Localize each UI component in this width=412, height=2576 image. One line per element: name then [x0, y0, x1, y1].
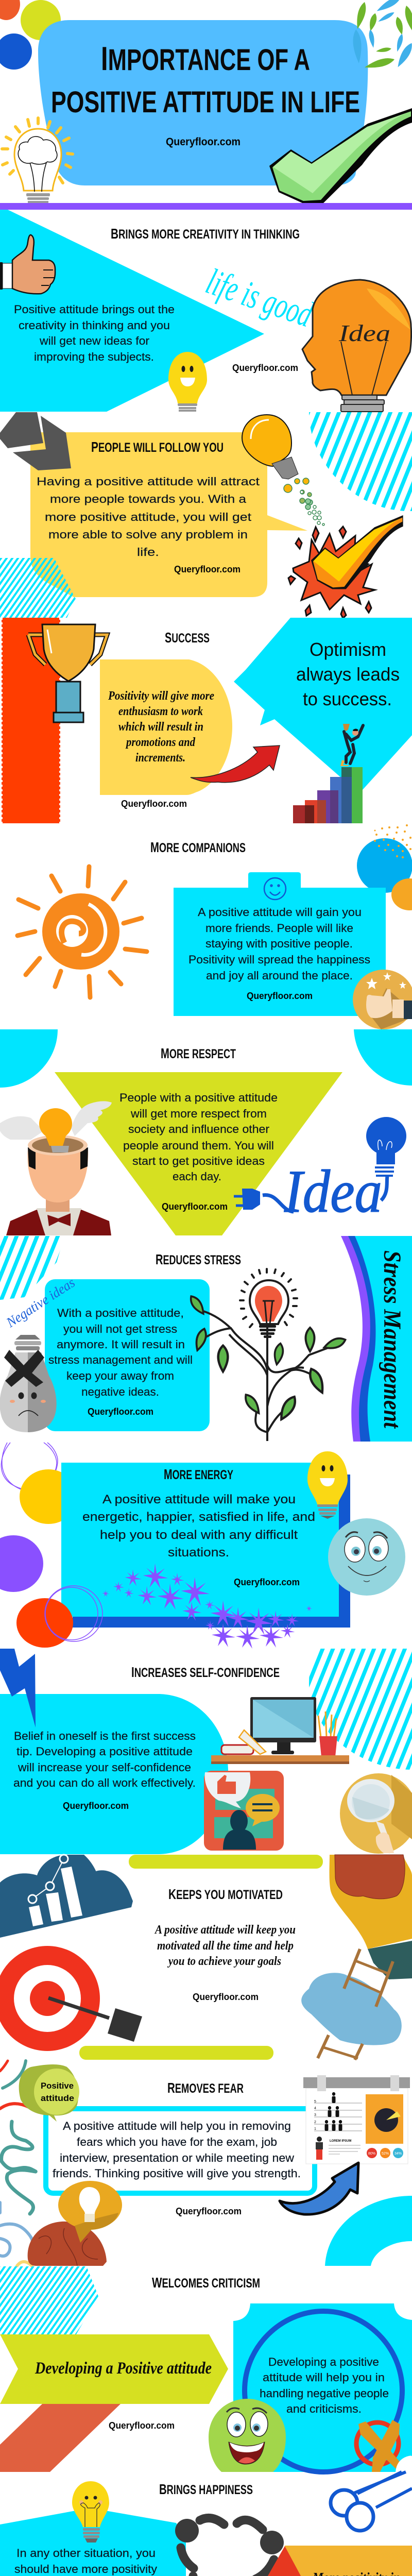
body text: Belief in oneself is the first success — [14, 1730, 196, 1742]
icon: infographic poster: 52% — [382, 2152, 389, 2156]
brand label: Queryfloor.com — [162, 1201, 228, 1212]
section: keeps you motivated — [0, 1855, 412, 2060]
icon: smiling bulb — [168, 352, 207, 412]
heading: INCREASES SELF-CONFIDENCE — [131, 1664, 280, 1680]
decorative blob: blue — [357, 838, 412, 893]
callout text: to success. — [303, 688, 392, 709]
body text — [14, 303, 175, 363]
body text: A positive attitude will make you — [102, 1493, 296, 1506]
decorative rings bottom — [45, 1586, 102, 1641]
icon: yellow smiling bulb — [307, 1451, 348, 1519]
decorative blob: orange — [391, 878, 412, 910]
body text: staying with positive people. — [205, 937, 353, 950]
body text in script: promotions and — [125, 736, 196, 749]
bubbles trail — [284, 478, 324, 526]
icon: infographic poster: 80% — [368, 2152, 375, 2156]
panel: serrated red band — [2, 618, 60, 823]
section: removes fear — [0, 2061, 412, 2266]
decorative circle: blue — [0, 33, 32, 70]
body text in script: A positive attitude will keep you — [154, 1923, 296, 1937]
stripe pattern: circle — [309, 1649, 412, 1770]
body text in script — [154, 1923, 296, 1968]
panel: cyan triangle — [0, 210, 264, 412]
body text in script — [108, 689, 214, 765]
brand label: Queryfloor.com — [234, 1577, 300, 1587]
body text: and joy all around the place. — [206, 969, 353, 982]
decorative bar bottom — [79, 2046, 273, 2060]
icon: infographic poster: 4 — [314, 2107, 316, 2110]
body text: and criticisms. — [286, 2402, 362, 2415]
script: negative ideas: Negative ideas — [3, 1275, 78, 1331]
brand label: Queryfloor.com — [63, 1801, 129, 1811]
body text: more friends. People will like — [205, 922, 353, 935]
script: life is good: life is good — [201, 260, 318, 335]
decorative rings top — [1, 1443, 58, 1492]
collar shape — [0, 412, 71, 470]
heading: MORE COMPANIONS — [150, 839, 246, 855]
panel: cyan outline box — [46, 2109, 315, 2193]
heading: BRINGS HAPPINESS — [159, 2481, 253, 2497]
body text — [14, 2547, 158, 2576]
body text: will get new ideas for — [39, 334, 149, 347]
body text: you will not get stress — [63, 1323, 177, 1335]
decorative parallelogram — [0, 2404, 121, 2472]
body text in script: increments. — [135, 751, 185, 765]
body text: stress management and will — [48, 1353, 193, 1366]
body text in script: you to achieve your goals — [167, 1955, 281, 1968]
body text: negative ideas. — [81, 1385, 159, 1398]
decorative blob: red — [16, 1598, 73, 1648]
stripe pattern: hexagon — [0, 558, 76, 618]
brand label: Queryfloor.com — [174, 564, 241, 574]
icon: red triangle with plus — [233, 2546, 334, 2576]
icon: tilted orange bulb — [242, 415, 298, 479]
title panel — [38, 20, 368, 185]
stripe pattern: corner — [0, 1236, 64, 1300]
decorative cyan arc — [325, 2196, 412, 2266]
panel: cyan ticket — [233, 2303, 412, 2472]
icon: light bulb with cloud — [2, 118, 73, 204]
decorative dots — [374, 824, 411, 858]
icon: trophy — [28, 624, 107, 722]
decorative bar top — [129, 1855, 323, 1869]
script: Idea: Idea — [284, 1158, 382, 1225]
body text in script: which will result in — [118, 720, 203, 734]
vertical script text: Stress Management — [379, 1250, 406, 1429]
brand label: Queryfloor.com — [121, 799, 187, 809]
text in head: Idea — [338, 320, 390, 346]
decorative blue ring — [245, 2311, 402, 2472]
section: welcomes criticism — [0, 2266, 412, 2531]
body text — [260, 2355, 389, 2415]
section: reduces stress — [0, 1236, 412, 1442]
icon: plant with glowing bulb — [188, 1269, 347, 1441]
body text: should have more positivity — [14, 2563, 157, 2575]
header section — [0, 0, 412, 210]
icon: desk with monitor, books and pencils — [211, 1697, 349, 1764]
decorative circle: orange — [0, 0, 20, 20]
panel: cyan rounded box — [45, 1279, 210, 1431]
body text: tip. Developing a positive attitude — [16, 1745, 193, 1758]
section: brings happiness — [0, 2481, 412, 2576]
icon: smiling bulb with filament — [72, 2481, 109, 2543]
body text: Developing a positive — [268, 2355, 379, 2368]
body text: more people towards you. With a — [50, 493, 247, 505]
script label: Developing a Positive attitude — [35, 2359, 212, 2378]
panel: cyan — [61, 1463, 339, 1617]
panel: yellow rounded box — [100, 659, 232, 795]
decorative squiggles — [0, 2061, 36, 2266]
icon: ring of people — [175, 2518, 284, 2576]
body text: and you can do all work effectively. — [13, 1776, 196, 1789]
body text: society and influence other — [128, 1123, 269, 1136]
body text: help you to deal with any difficult — [100, 1528, 298, 1542]
heading: PEOPLE WILL FOLLOW YOU — [91, 439, 224, 455]
body text: friends. Thinking positive will give you strength. — [53, 2167, 301, 2180]
brand label: Queryfloor.com — [88, 1406, 153, 1417]
icon: sad crossed bulb — [0, 1335, 57, 1432]
body text: People with a positive attitude — [119, 1091, 278, 1104]
icon: sun spiral — [18, 867, 147, 997]
section: more energy — [0, 1443, 405, 1649]
title — [51, 40, 360, 119]
body text: Having a positive attitude will attract — [37, 475, 260, 488]
decorative circle: lime — [21, 0, 61, 40]
icon: smiley — [264, 878, 286, 900]
body text: energetic, happier, satisfied in life, and — [82, 1510, 315, 1524]
body text: interview, presentation or while meeting new — [60, 2151, 294, 2164]
arrow: blue — [280, 2163, 358, 2214]
body text: fears which you have for the exam, job — [77, 2136, 277, 2148]
panel shadow: blue — [73, 1475, 350, 1628]
panel: cyan note — [174, 872, 386, 1016]
brand label: Queryfloor.com — [176, 2206, 242, 2216]
heading: REDUCES STRESS — [156, 1251, 241, 1267]
brand label: Queryfloor.com — [232, 363, 298, 373]
brand label: Queryfloor.com — [193, 1992, 259, 2002]
icon: blue key rings — [331, 2472, 412, 2531]
icon: lightning — [0, 1649, 36, 1727]
brand label: Queryfloor.com — [247, 991, 313, 1001]
icon: thumbs up — [0, 235, 55, 294]
icon: infographic poster: 3 — [314, 2113, 316, 2117]
body text: anymore. It will result in — [57, 1338, 185, 1351]
icon: green check mark — [269, 108, 412, 203]
panel: cyan hexagon — [0, 2508, 186, 2576]
panel: cyan badge — [234, 618, 412, 790]
icon: man with bulb and wings — [0, 1101, 112, 1235]
icon: jumping businessman with trophy — [340, 724, 363, 766]
panel: yellow speech bubble — [30, 432, 307, 597]
section: people will follow you — [0, 412, 412, 618]
body text: handling negative people — [260, 2387, 389, 2400]
icon: infographic poster: LOREM IPSUM — [330, 2140, 351, 2143]
heading: BRINGS MORE CREATIVITY IN THINKING — [111, 226, 300, 242]
panel: lime trapezoid — [55, 1072, 342, 1235]
body text: A positive attitude will help you in removing — [63, 2120, 291, 2132]
callout text — [296, 639, 400, 709]
decorative blob: yellow — [20, 1469, 77, 1524]
decorative cyan bowl left — [0, 1029, 58, 1088]
icon: infographic poster: 5 — [314, 2100, 316, 2104]
body text: attitude will help you in — [263, 2371, 385, 2384]
body text: With a positive attitude, — [57, 1307, 184, 1319]
body text — [48, 1307, 193, 1398]
heading: MORE RESPECT — [161, 1045, 236, 1061]
speech bubble: positive attitude: attitude — [41, 2093, 74, 2103]
panel: cyan blob — [0, 1694, 228, 1854]
body text: Positivity will spread the happiness — [188, 953, 370, 966]
icon: infographic poster: 34% — [394, 2152, 402, 2156]
section: creativity — [0, 210, 411, 412]
body text: life. — [137, 546, 159, 558]
section: success — [2, 618, 412, 823]
decorative blob: purple — [0, 1535, 43, 1592]
body text: creativity in thinking and you — [19, 319, 170, 332]
icon: idea plug cable bulb — [234, 1117, 406, 1225]
heading: WELCOMES CRITICISM — [152, 2275, 260, 2291]
icon: idea head bulb — [302, 280, 411, 412]
chart: rising stairs — [293, 767, 363, 823]
heading: SUCCESS — [165, 630, 210, 646]
icon: red ring with orange cross — [356, 2420, 412, 2472]
icon: explosion with yellow check — [288, 515, 403, 618]
body text in script: enthusiasm to work — [118, 705, 203, 718]
heading: KEEPS YOU MOTIVATED — [168, 1886, 283, 1902]
callout text: Optimism — [310, 639, 386, 660]
decorative purple sparkles — [102, 1564, 312, 1649]
callout text: always leads — [296, 664, 400, 685]
body text: start to get positive ideas — [132, 1155, 265, 1167]
divider bar — [0, 203, 412, 210]
speech bubble: positive attitude: Positive — [41, 2081, 74, 2091]
section: increases self-confidence — [0, 1649, 412, 1854]
body text — [13, 1730, 196, 1789]
icon: brain bulb with ladder and cloud — [301, 1855, 412, 2060]
icon: infographic poster — [303, 2075, 410, 2164]
icon: thumbs up coin — [353, 970, 412, 1029]
body text: keep your away from — [66, 1369, 174, 1382]
icon: infographic poster: 1 — [314, 2127, 316, 2131]
title: IMPORTANCE OF A — [101, 40, 310, 77]
brand label: Queryfloor.com — [166, 136, 241, 148]
icon: chart cloud — [0, 1855, 133, 1938]
icon: target with arrow — [0, 1946, 142, 2051]
body text — [188, 906, 370, 982]
body text: people around them. You will — [123, 1139, 274, 1152]
body text: more able to solve any problem in — [48, 528, 248, 541]
section: more companions — [18, 824, 412, 1029]
section: more respect — [0, 1029, 412, 1235]
body text — [53, 2120, 301, 2180]
banner: stress management — [341, 1236, 412, 1442]
heading: MORE ENERGY — [164, 1466, 233, 1482]
body text: will get more respect from — [130, 1107, 267, 1120]
icon: laughing green face — [209, 2399, 286, 2472]
icon: smiling face — [328, 1518, 405, 1596]
body text — [82, 1493, 315, 1560]
decorative cyan bowl right — [354, 1029, 412, 1086]
icon: infographic poster: 2 — [314, 2121, 316, 2124]
body text: In any other situation, you — [16, 2547, 156, 2560]
body text: each day. — [173, 1170, 221, 1183]
body text: situations. — [168, 1546, 229, 1560]
body text: Positive attitude brings out the — [14, 303, 175, 316]
body text in script: motivated all the time and help — [157, 1939, 294, 1953]
body text: improving the subjects. — [34, 350, 154, 363]
stripe pattern: circle — [309, 412, 412, 511]
icon: leaf and water wreath — [352, 0, 412, 71]
icon: phone with speech bubbles — [204, 1771, 284, 1851]
speech bubble: positive attitude — [19, 2064, 79, 2122]
body text: more positive attitude, you will get — [45, 511, 251, 523]
heading: REMOVES FEAR — [167, 2080, 244, 2096]
body text: will increase your self-confidence — [18, 1761, 191, 1774]
panel: lime chevron — [0, 2334, 228, 2404]
body text — [119, 1091, 278, 1183]
panel: amber block — [285, 2546, 412, 2576]
body text: A positive attitude will gain you — [198, 906, 362, 919]
body text — [37, 475, 260, 558]
icon: brain with idea bubble — [28, 2181, 122, 2266]
brand label: Queryfloor.com — [109, 2420, 175, 2431]
icon: magnifier coin — [340, 1773, 412, 1854]
body text in script: Positivity will give more — [108, 689, 214, 703]
stripe pattern: hexagon — [0, 2266, 98, 2334]
arrow: red — [191, 745, 280, 783]
